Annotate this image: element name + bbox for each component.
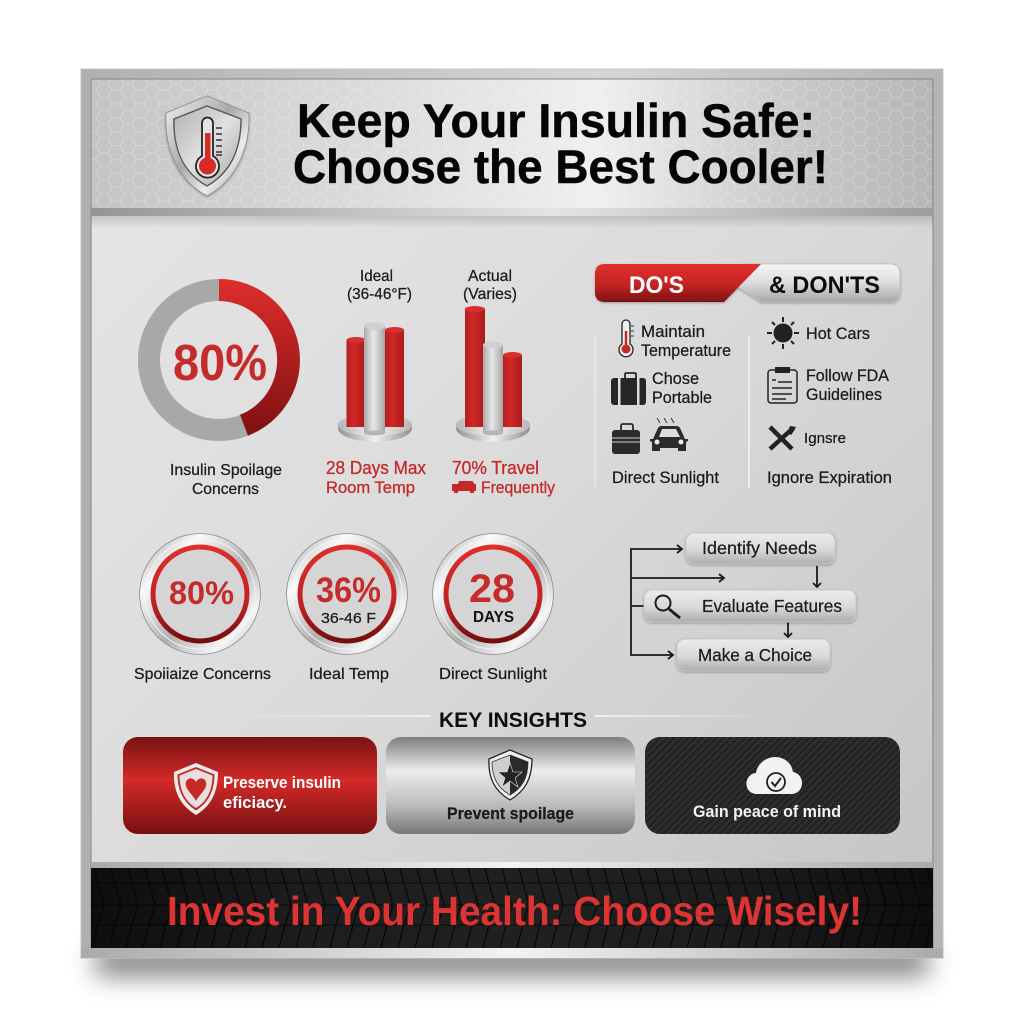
bar chart: ideal [326,268,426,497]
flow connectors and arrows [631,545,821,659]
step: evaluate features: Evaluate Features [702,596,842,616]
do's and don'ts header pill [595,264,900,302]
donut caption: Insulin Spoilage [170,462,282,479]
gauge: 28 days direct sunlight: 28 [469,567,515,611]
flowchart: choosing a cooler [631,533,856,671]
title: Keep Your Insulin Safe: [297,94,815,147]
title [293,94,828,193]
gauge: 36% ideal temp: Ideal Temp [309,666,389,683]
insight card: prevent spoilage: Prevent spoilage [447,804,574,823]
don't: ignore with crossed tools: Ignsre [804,430,846,447]
do: chose portable: Portable [652,389,712,407]
insight card: gain peace of mind: Gain peace of mind [693,802,841,821]
bar chart: actual: (Varies) [463,286,517,303]
bar chart: actual: Actual [468,268,512,285]
do: maintain temperature: Temperature [641,342,731,360]
don't: follow FDA guidelines [768,367,889,404]
insight card: prevent spoilage [386,737,635,834]
don't: ignore with crossed tools [767,426,892,487]
donut chart: 80% insulin spoilage [149,279,300,498]
title: Choose the Best Cooler! [293,140,828,193]
drop shadow under frame [96,946,928,976]
step: evaluate features [644,590,856,622]
ideal caption: Room Temp [326,479,415,497]
do's and don'ts panel [595,264,900,488]
gauge: 36% ideal temp: 36-46 F [321,610,376,627]
donut chart: 80% insulin spoilage: 80% [173,334,267,391]
gauge: 80% spoilage concerns: Spoiiaize Concerns [134,666,271,683]
don't: follow FDA guidelines: Guidelines [806,386,882,404]
gauge: 28 days direct sunlight [432,533,554,683]
header banner [91,80,933,228]
do's and don'ts header pill: DO'S [629,272,684,299]
bar chart: ideal: Ideal [360,268,393,285]
do: chose portable [611,370,712,407]
icon: heart shield [174,763,218,815]
don't: follow FDA guidelines: Follow FDA [806,367,889,385]
do's and don'ts header pill: & DON'TS [769,272,880,299]
don't: hot cars [767,317,870,349]
insight card: gain peace of mind [645,737,900,834]
do: direct sunlight with case and car: Direct Sunlight [612,469,719,487]
gauge: 80% spoilage concerns [134,533,271,683]
insight card: preserve insulin efficacy: eficiacy. [223,793,287,812]
gauge: 36% ideal temp [286,533,408,683]
ideal caption [326,458,426,497]
actual caption: Frequently [481,479,556,497]
ideal caption: 28 Days Max [326,458,426,478]
step: identify needs [686,533,835,564]
icon: shield with thermometer [166,96,249,196]
step: identify needs: Identify Needs [702,538,817,558]
icon: cloud with check [746,757,802,794]
key insights heading: KEY INSIGHTS [439,709,587,732]
icon: star shield [489,750,532,800]
donut caption: Concerns [192,481,259,498]
donut caption [170,462,282,498]
do: maintain temperature: Maintain [641,323,705,341]
do: chose portable: Chose [652,370,699,388]
don't: hot cars: Hot Cars [806,325,870,343]
insight card: preserve insulin efficacy [123,737,377,834]
step: make a choice [677,639,830,671]
don't: ignore with crossed tools: Ignore Expiration [767,469,892,487]
step: make a choice: Make a Choice [698,645,812,665]
insight card: preserve insulin efficacy: Preserve insulin [223,773,341,792]
gauge: 80% spoilage concerns: 80% [169,575,234,611]
gauge: 28 days direct sunlight: Direct Sunlight [439,666,548,683]
main frame panel [81,69,943,958]
actual caption [452,458,556,497]
footer slogan: Invest in Your Health: Choose Wisely! [167,888,862,934]
actual caption: 70% Travel [452,458,539,478]
do: maintain temperature [619,320,731,360]
gauge: 28 days direct sunlight: DAYS [473,609,514,626]
bar chart: actual [452,268,556,497]
bar chart: ideal: (36-46°F) [347,286,412,303]
do: direct sunlight with case and car [612,418,719,487]
footer banner [81,862,943,958]
gauge: 36% ideal temp: 36% [316,571,381,610]
